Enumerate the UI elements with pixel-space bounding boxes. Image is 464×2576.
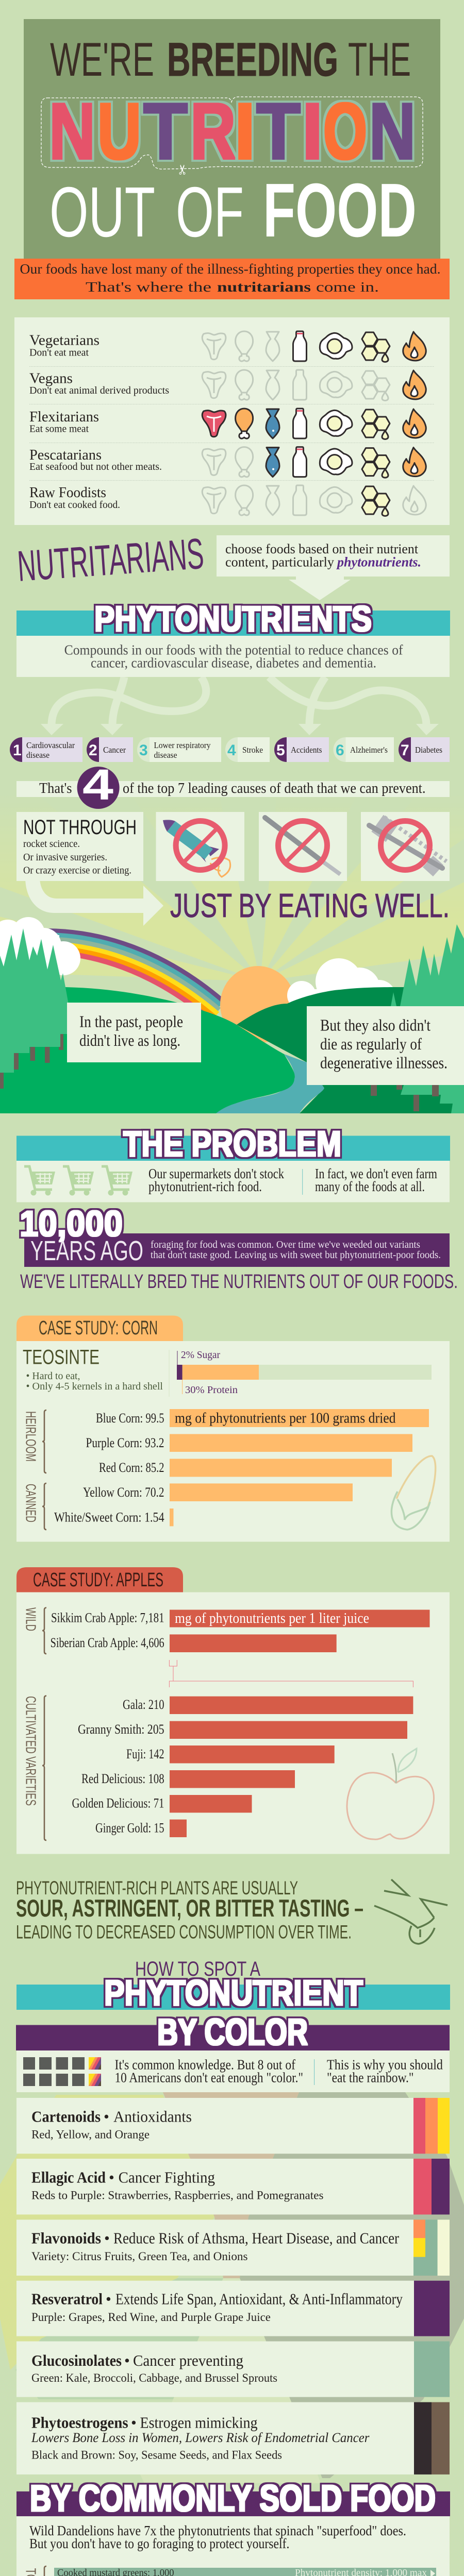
title line: we're breeding the: WE'RE — [50, 33, 154, 86]
banner: 10,000 years ago — [20, 1204, 450, 1267]
icon: no saw — [361, 812, 450, 881]
panel: phytoestrogens: Estrogen mimicking — [140, 2414, 258, 2432]
statement: that's 4 of the top 7 — [16, 760, 450, 809]
rainbow — [46, 931, 222, 1023]
pill: 7 diabetes: 7 — [401, 742, 409, 759]
panel: ellagic acid: Reds to Purple: Strawberries, Raspberries, and Pomegranates — [31, 2189, 324, 2202]
row: raw foodists — [29, 485, 426, 516]
icon: no scalpel — [259, 812, 347, 881]
section header: phytonutrients: PHYTONUTRIENTS — [94, 599, 372, 639]
row: pescatarians — [29, 447, 426, 478]
callout: but they also: But they also didn't — [320, 1016, 430, 1035]
icon: corn doodle — [391, 1456, 436, 1530]
pill: 3 lower respiratory disease: disease — [154, 750, 177, 760]
panel: phytonutrients definition: Compounds in our foods with the potential to reduce chances of — [64, 642, 403, 657]
panel: carotenoids: Red, Yellow, and Orange — [31, 2128, 150, 2141]
landscape illustration — [0, 917, 464, 1113]
callout: in the past: In the past, people — [79, 1012, 183, 1030]
title line: we're breeding the: BREEDING — [167, 33, 338, 86]
chart: corn phytonutrients: mg of phytonutrients per 100 grams dried — [175, 1411, 396, 1426]
pill: 1 cardiovascular disease — [10, 737, 82, 762]
chart: corn phytonutrients: White/Sweet Corn: 1.54 — [54, 1510, 164, 1525]
title word: nutrition: I — [234, 87, 256, 176]
panel: glucosinolates: • — [124, 2351, 130, 2369]
pill: 3 lower respiratory disease: Lower respiratory — [154, 740, 211, 750]
panel: phytoestrogens: • — [131, 2414, 137, 2432]
title word: nutrition: N — [49, 87, 95, 176]
chart: apple phytonutrients: Sikkim Crab Apple: 7,181 — [51, 1611, 164, 1625]
statement: that's 4 of the top 7: of the top 7 leading causes of death that we can prevent. — [123, 781, 426, 796]
hill left — [0, 987, 295, 1113]
panel: ellagic acid: • — [109, 2168, 114, 2187]
pill: 1 cardiovascular disease: Cardiovascular — [26, 740, 75, 750]
panel: ellagic acid — [16, 2159, 450, 2214]
title line: out of food — [49, 168, 417, 253]
chart: corn phytonutrients: CANNED — [23, 1484, 39, 1522]
section header: the problem — [16, 1124, 450, 1164]
panel: not through: NOT THROUGH — [23, 816, 137, 839]
panel: resveratrol: Purple: Grapes, Red Wine, and Purple Grape Juice — [31, 2311, 271, 2324]
cloud left — [0, 917, 80, 975]
chart: corn phytonutrients — [23, 1409, 429, 1530]
panel: ellagic acid: Cancer Fighting — [119, 2168, 215, 2187]
chart: apple phytonutrients — [23, 1607, 430, 1840]
title word: nutrition: O — [323, 87, 367, 176]
chart: teosinte composition — [177, 1349, 432, 1396]
callout: nutritarians definition with arrow — [217, 535, 450, 600]
chart: apple phytonutrients: Gala: 210 — [123, 1697, 164, 1712]
panel: the problem text: many of the foods at all. — [315, 1179, 425, 1194]
row: vegans — [29, 370, 426, 401]
panel: not through: Or crazy exercise or dieting. — [23, 865, 131, 876]
callout: but they also — [307, 1006, 464, 1085]
pill: 6 alzheimer's: 6 — [336, 742, 344, 759]
panel: phytoestrogens — [16, 2402, 450, 2475]
cut-out dashed outline — [41, 97, 423, 169]
hill right — [237, 987, 464, 1113]
chart: teosinte composition: 2% Sugar — [181, 1349, 220, 1361]
panel: resveratrol: Extends Life Span, Antioxidant, & Anti-Inflammatory — [115, 2290, 403, 2308]
callout: but they also: die as regularly of — [320, 1035, 422, 1053]
icon: scissors: ✂ — [175, 164, 191, 175]
icon: shopping carts — [24, 1166, 132, 1195]
chart: apple phytonutrients: CULTIVATED VARIETIES — [23, 1696, 39, 1806]
chart: corn phytonutrients: Red Corn: 85.2 — [99, 1460, 164, 1475]
row: raw foodists: Don't eat cooked food. — [29, 499, 120, 511]
panel: the problem text: In fact, we don't even farm — [315, 1166, 437, 1181]
banner: 10,000 years ago: foraging for food was common. Over time we've weeded out variants — [151, 1239, 420, 1250]
panel: flavonoids — [16, 2219, 450, 2276]
row: vegans: Don't eat animal derived products — [29, 385, 169, 396]
panel: commonly sold food — [16, 2516, 450, 2576]
chart: corn phytonutrients: HEIRLOOM — [23, 1411, 39, 1462]
row: raw foodists: Raw Foodists — [29, 485, 106, 501]
heading: nutritarians: NUTRITARIANS — [16, 529, 205, 590]
case study: corn — [16, 1316, 450, 1541]
chart: vegetables — [23, 2566, 436, 2576]
chart: corn phytonutrients: Blue Corn: 99.5 — [96, 1411, 164, 1426]
row: pescatarians: Pescatarians — [29, 447, 102, 463]
banner: 10,000 years ago: that don't taste good. Leaving us with sweet but phytonutrient-poor foods. — [151, 1249, 441, 1261]
intro banner: Our foods have lost many of the illness-fighting properties they once had. — [20, 261, 440, 277]
chart: 8 out of 10 squares — [23, 2057, 101, 2086]
chart: apple phytonutrients: Granny Smith: 205 — [78, 1722, 164, 1737]
pill: 4 stroke: Stroke — [242, 745, 263, 755]
intro banner — [14, 259, 450, 299]
panel: the problem text — [16, 1161, 450, 1202]
intro banner: That's where the — [86, 279, 211, 295]
sun — [220, 966, 295, 1043]
chart: apple phytonutrients: mg of phytonutrients per 1 liter juice — [175, 1611, 369, 1626]
disease list — [10, 737, 450, 762]
intro text — [29, 2523, 406, 2551]
chart: apple phytonutrients: Ginger Gold: 15 — [95, 1821, 164, 1835]
panel: phytoestrogens: Black and Brown: Soy, Sesame Seeds, and Flax Seeds — [31, 2448, 282, 2461]
pill: 5 accidents: 5 — [276, 742, 285, 759]
arrow: not through to just by eating well — [25, 878, 163, 926]
title line: we're breeding the: THE — [348, 33, 411, 86]
callout: nutritarians definition with arrow: phytonutrients. — [336, 554, 421, 570]
title word: nutrition: I — [302, 87, 323, 176]
panel: carotenoids: Cartenoids — [31, 2107, 101, 2126]
panel: not through: rocket science. — [23, 838, 80, 850]
panel: resveratrol: • — [106, 2290, 111, 2308]
chart: apple phytonutrients: Siberian Crab Apple: 4,606 — [51, 1635, 164, 1650]
tab: case study apples: CASE STUDY: APPLES — [33, 1569, 163, 1591]
panel: flavonoids: • — [104, 2229, 110, 2247]
tab: case study corn — [16, 1316, 183, 1341]
panel: phytonutrients definition: cancer, cardiovascular disease, diabetes and dementia. — [91, 655, 376, 671]
river — [216, 1054, 324, 1113]
teosinte description: • Only 4-5 kernels in a hard shell — [26, 1381, 163, 1392]
statement: that's 4 of the top 7: That's — [39, 781, 72, 796]
pill: 4 stroke: 4 — [227, 742, 236, 759]
chart: teosinte composition: 30% Protein — [185, 1384, 238, 1396]
row: flexitarians: Eat some meat — [29, 423, 89, 435]
panel: eat the rainbow: "eat the rainbow." — [327, 2070, 413, 2086]
title word: nutrition: T — [256, 87, 301, 176]
teosinte description: • Hard to eat, — [26, 1370, 80, 1382]
section header: the problem: THE PROBLEM — [123, 1124, 341, 1164]
teosinte description: TEOSINTE — [23, 1346, 100, 1368]
panel: eat the rainbow: It's common knowledge. But 8 out of — [114, 2057, 295, 2072]
pill: 4 stroke — [225, 737, 270, 762]
background rays behind colour list — [0, 2092, 464, 2483]
row: vegetarians: Vegetarians — [29, 333, 100, 348]
panel: eat the rainbow — [16, 2050, 450, 2092]
row: vegans: Vegans — [29, 371, 73, 386]
panel: phytoestrogens: Phytoestrogens — [31, 2414, 128, 2432]
pill: 3 lower respiratory disease: 3 — [139, 742, 148, 759]
pill: 1 cardiovascular disease: disease — [26, 750, 49, 760]
arrows: phytonutrients to diseases — [41, 677, 439, 735]
intro banner: come in. — [316, 279, 379, 295]
chart: apple phytonutrients: WILD — [23, 1607, 39, 1631]
panel: eat the rainbow: This is why you should — [327, 2057, 443, 2072]
panel: resveratrol: Resveratrol — [31, 2290, 103, 2308]
tab: case study apples — [16, 1567, 183, 1592]
pill: 5 accidents — [274, 737, 329, 762]
pill: 7 diabetes — [399, 737, 450, 762]
statement: sour astringent bitter: PHYTONUTRIENT-RICH PLANTS ARE USUALLY — [16, 1877, 298, 1899]
statement: sour astringent bitter — [16, 1877, 363, 1942]
callout: nutritarians definition with arrow: content, particularly — [225, 554, 334, 570]
teosinte description — [23, 1346, 163, 1392]
panel: flavonoids: Reduce Risk of Athsma, Heart Disease, and Cancer — [113, 2229, 400, 2247]
pill: 7 diabetes: Diabetes — [415, 745, 442, 755]
panel: the problem text: phytonutrient-rich food. — [148, 1179, 262, 1194]
pill: 2 cancer: Cancer — [103, 745, 126, 755]
title line: out of food: OF — [176, 173, 244, 252]
trees right — [371, 924, 464, 1113]
panel: diet types — [14, 317, 450, 525]
icon: no rocket — [156, 812, 244, 881]
title word: nutrition: N — [369, 87, 416, 176]
chart: apple phytonutrients: Golden Delicious: 71 — [72, 1796, 164, 1810]
row: flexitarians: Flexitarians — [29, 409, 99, 425]
title line: we're breeding the — [50, 33, 411, 86]
pill: 2 cancer: 2 — [89, 742, 97, 759]
panel: flavonoids: Variety: Citrus Fruits, Green Tea, and Onions — [31, 2250, 248, 2263]
panel: the problem text: Our supermarkets don't stock — [148, 1166, 284, 1181]
pill: 5 accidents: Accidents — [291, 745, 322, 755]
panel: glucosinolates: Green: Kale, Broccoli, Cabbage, and Brussel Sprouts — [31, 2371, 277, 2384]
panel: ellagic acid: Ellagic Acid — [31, 2168, 106, 2187]
chart: corn phytonutrients: Yellow Corn: 70.2 — [83, 1485, 164, 1500]
callout: in the past: didn't live as long. — [79, 1031, 180, 1049]
panel: eat the rainbow: 10 Americans don't eat enough "color." — [114, 2070, 303, 2086]
section header: by color: BY COLOR — [157, 2012, 308, 2053]
intro text: But you don't have to go foraging to protect yourself. — [29, 2536, 289, 2551]
banner: 10,000 years ago: YEARS AGO — [30, 1235, 143, 1266]
panel: carotenoids: • — [104, 2107, 109, 2126]
row: flexitarians — [29, 409, 426, 439]
chart: apple phytonutrients: Fuji: 142 — [126, 1747, 164, 1761]
panel: not through: Or invasive surgeries. — [23, 852, 107, 863]
chart: corn phytonutrients: Purple Corn: 93.2 — [86, 1435, 164, 1450]
panel: resveratrol — [16, 2281, 450, 2336]
tab: case study corn: CASE STUDY: CORN — [39, 1317, 158, 1339]
heading: how to spot a: HOW TO SPOT A — [135, 1958, 260, 1980]
panel: glucosinolates — [16, 2341, 450, 2397]
icon: sour face doodle — [374, 1879, 448, 1944]
row: vegetarians — [29, 331, 426, 362]
banner: 10,000 years ago: 10,000 — [20, 1204, 123, 1244]
panel: not through — [16, 812, 143, 881]
pill: 6 alzheimer's — [333, 737, 394, 762]
panel: glucosinolates: Cancer preventing — [133, 2351, 243, 2369]
pill: 2 cancer — [87, 737, 133, 762]
panel: phytoestrogens: Lowers Bone Loss in Women, Lowers Risk of Endometrial Cancer — [31, 2430, 370, 2445]
title word: nutrition: U — [97, 87, 141, 176]
trees left — [0, 928, 74, 1089]
intro text: Wild Dandelions have 7x the phytonutrients that spinach "superfood" does. — [29, 2523, 406, 2538]
title word: nutrition — [49, 87, 416, 176]
panel: carotenoids: Antioxidants — [113, 2107, 192, 2126]
statement: that's 4 of the top 7: 4 — [82, 760, 113, 809]
pill: 3 lower respiratory disease — [137, 737, 221, 762]
panel: carotenoids — [16, 2098, 450, 2154]
cloud right — [287, 958, 396, 1014]
panel: flavonoids: Flavonoids — [31, 2229, 101, 2247]
section header: by color — [16, 2012, 450, 2053]
sun rays background — [0, 841, 464, 980]
section header: phytonutrient: PHYTONUTRIENT — [104, 1973, 363, 2013]
title line: out of food: OUT — [49, 173, 155, 252]
case study: apples — [16, 1567, 450, 1854]
chart: apple phytonutrients: Red Delicious: 108 — [81, 1771, 164, 1786]
callout: in the past — [67, 1003, 201, 1062]
panel: phytonutrients definition — [16, 636, 450, 677]
pill: 1 cardiovascular disease: 1 — [13, 742, 22, 759]
row: vegetarians: Don't eat meat — [29, 347, 89, 359]
callout: nutritarians definition with arrow: choose foods based on their nutrient — [225, 541, 419, 556]
title word: nutrition: T — [143, 87, 188, 176]
row: pescatarians: Eat seafood but not other meats. — [29, 461, 162, 472]
intro banner: nutritarians — [217, 279, 311, 295]
pill: 6 alzheimer's: Alzheimer's — [350, 745, 388, 755]
title word: nutrition: R — [190, 87, 236, 176]
icon: apple doodle — [347, 1749, 434, 1839]
title panel — [24, 19, 440, 259]
panel: glucosinolates: Glucosinolates — [31, 2351, 122, 2369]
